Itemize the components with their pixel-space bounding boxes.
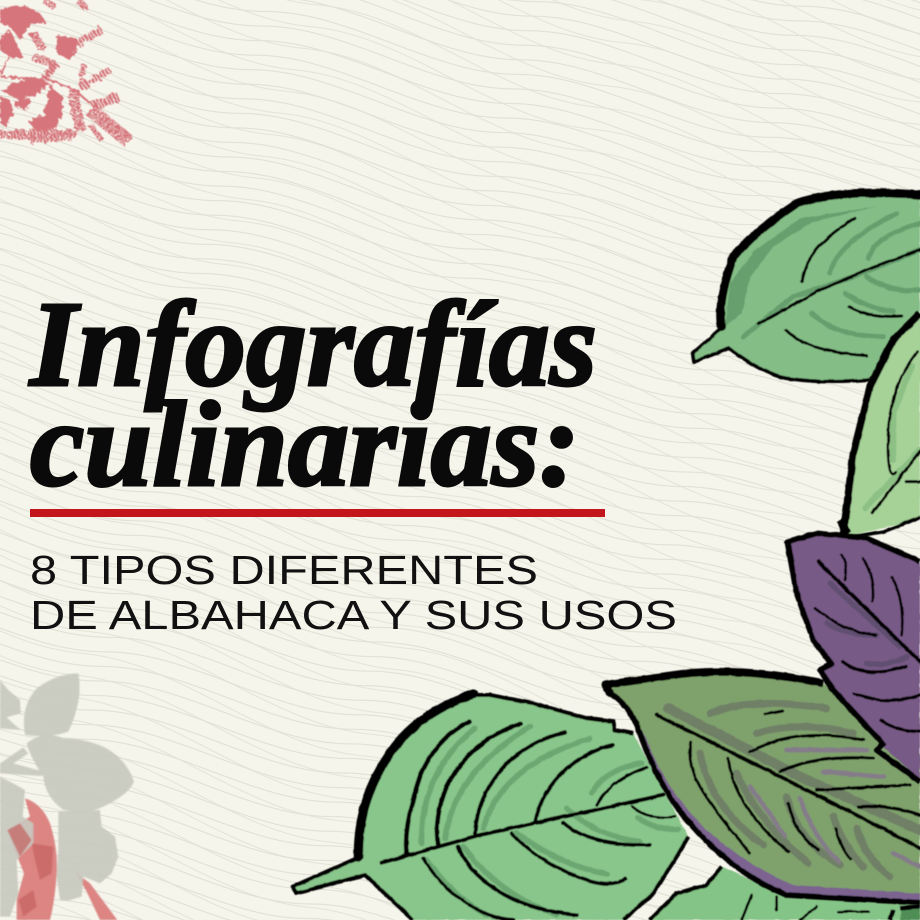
title: culinarias: xyxy=(30,377,580,512)
grey leaves xyxy=(0,673,134,917)
red ribbon xyxy=(7,798,117,920)
leaf: top green xyxy=(693,193,920,382)
subtitle: DE ALBAHACA Y SUS USOS xyxy=(30,592,677,638)
title xyxy=(28,277,597,512)
leaf: light green right xyxy=(843,313,920,537)
illustration: grey herb and red ribbon, bottom left xyxy=(0,673,134,920)
title: Infografías xyxy=(28,277,597,412)
leaf: green bottom right xyxy=(650,867,920,920)
subtitle: 8 TIPOS DIFERENTES xyxy=(30,547,538,593)
illustration: red fern, top left xyxy=(0,0,129,142)
leaf: dark green and purple-edged xyxy=(605,671,920,903)
red divider xyxy=(30,509,605,517)
dark ribbon overlap xyxy=(7,823,53,917)
subtitle xyxy=(30,547,677,638)
leaf: large green bottom xyxy=(293,694,688,920)
leaf: purple xyxy=(787,520,920,782)
